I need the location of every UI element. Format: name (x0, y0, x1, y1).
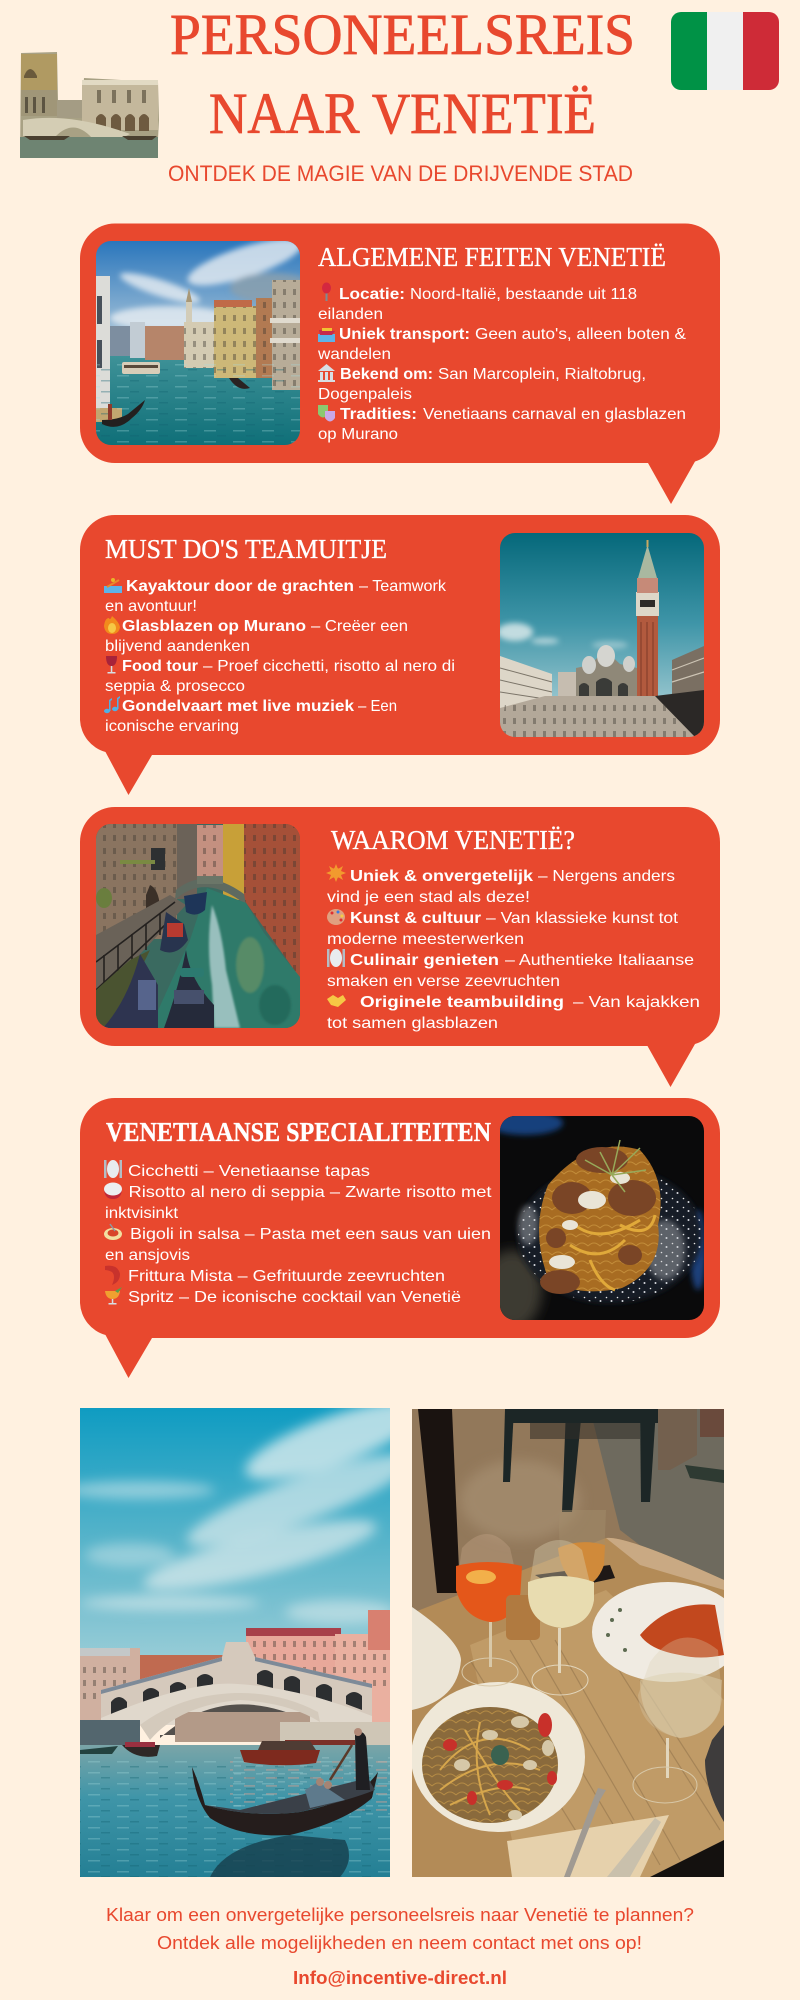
text: waarom: – Van kajakken (573, 994, 700, 1011)
icon: handshake (327, 995, 346, 1007)
text: waarom: smaken en verse zeevruchten (327, 973, 560, 990)
right procuratie (672, 646, 704, 694)
text: feiten: Noord-Italië, bestaande uit 118 (410, 286, 637, 303)
basket (705, 1725, 724, 1822)
text: waarom: Uniek & onvergetelijk (350, 868, 533, 885)
pasta mound (539, 1147, 661, 1291)
napkin and cutlery (507, 1815, 669, 1877)
text: waarom: Kunst & cultuur (350, 910, 481, 927)
panel: waarom venetië (80, 807, 720, 1087)
icon: Italian flag (671, 12, 779, 90)
gondola (192, 1767, 378, 1835)
icon: sun (326, 864, 346, 882)
text: must do's: Food tour (122, 658, 198, 675)
icon: rice bowl (104, 1182, 122, 1199)
icon: musical notes (104, 696, 120, 713)
text: must do's: iconische ervaring (105, 718, 239, 735)
speech bubble (80, 515, 720, 795)
small boats (122, 1745, 160, 1757)
text: feiten: San Marcoplein, Rialtobrug, (438, 366, 646, 383)
text: feiten: Locatie: (339, 286, 405, 303)
piazza (500, 696, 704, 737)
white wine (528, 1540, 594, 1628)
gondolas (184, 892, 207, 915)
text: specialiteiten: inktvisinkt (105, 1205, 179, 1222)
chair (503, 1409, 658, 1512)
text: must do's: seppia & prosecco (105, 678, 245, 695)
heading: VENETIAANSE SPECIALITEITEN (106, 1117, 491, 1147)
title: PERSONEELSREIS (170, 2, 635, 67)
text: feiten: Venetiaans carnaval en glasblazen (423, 406, 686, 423)
icon: shrimp (105, 1266, 120, 1285)
vaporetto (122, 362, 160, 374)
text: waarom: Originele teambuilding (360, 994, 564, 1011)
icon: round pushpin (322, 282, 331, 301)
footer text: Ontdek alle mogelijkheden en neem contact met ons op! (157, 1933, 642, 1953)
procuratie left (500, 656, 552, 708)
left buildings (96, 824, 177, 939)
icon: palette (327, 909, 345, 925)
text: must do's: blijvend aandenken (105, 638, 250, 655)
text: waarom: Culinair genieten (350, 952, 499, 969)
text: feiten: wandelen (317, 346, 391, 363)
heading: WAAROM VENETIË? (331, 825, 575, 855)
text: must do's: – Teamwork (359, 578, 447, 595)
text: must do's: Gondelvaart met live muziek (122, 698, 354, 715)
photo: San Marco square (497, 533, 704, 737)
waves (96, 360, 300, 445)
text: specialiteiten: Frittura Mista – Gefrituurde zeevruchten (128, 1268, 445, 1285)
title: NAAR VENETIË (209, 81, 596, 146)
text: waarom: tot samen glasblazen (327, 1015, 498, 1032)
speech bubble (80, 224, 720, 504)
panel: specialiteiten (80, 1098, 720, 1378)
text: must do's: – Creëer een (311, 618, 408, 635)
text: feiten: Uniek transport: (339, 326, 470, 343)
photo: Canal Grande (96, 241, 300, 445)
walkway and railing (96, 895, 186, 990)
campanile (637, 615, 658, 697)
gondolas (102, 400, 145, 427)
bridge (101, 1642, 372, 1718)
photo: restaurant table with spritz and pasta (411, 1409, 744, 1877)
speech bubble (80, 1098, 720, 1378)
gondolier and passengers (355, 1732, 370, 1790)
icon: spaghetti (104, 1224, 122, 1240)
text: waarom: moderne meesterwerken (327, 931, 524, 948)
footer text: Klaar om een onvergetelijke personeelsreis naar Venetië te plannen? (106, 1905, 694, 1925)
text: must do's: – Proef cicchetti, risotto al nero di (203, 658, 455, 675)
left napkin plate (412, 1607, 461, 1710)
text: specialiteiten: Risotto al nero di seppia – Zwarte risotto met (128, 1184, 492, 1201)
text: waarom: – Nergens anders (538, 868, 675, 885)
icon: classical building (318, 364, 335, 382)
text: specialiteiten (105, 1163, 492, 1306)
subtitle: ONTDEK DE MAGIE VAN DE DRIJVENDE STAD (168, 161, 633, 186)
water (150, 888, 300, 1028)
back glass (559, 1510, 606, 1586)
contact email: Info@incentive-direct.nl (293, 1968, 507, 1988)
text: must do's: en avontuur! (105, 598, 197, 615)
text: must do's (105, 578, 455, 735)
text: specialiteiten: Spritz – De iconische cocktail van Venetië (128, 1289, 461, 1306)
icon: plate and cutlery (104, 1160, 122, 1178)
icon: rowing boat (104, 578, 122, 593)
footer text (106, 1905, 694, 1953)
text: feiten: Bekend om: (340, 366, 433, 383)
icon: plate and cutlery (327, 949, 345, 967)
icon: theatre masks (318, 405, 335, 422)
bridge (175, 880, 246, 903)
photo: pasta dish (500, 1116, 704, 1320)
table (412, 1538, 724, 1877)
text: feiten: Dogenpaleis (318, 386, 412, 403)
lower wall (96, 950, 150, 1028)
text: feiten: eilanden (318, 306, 383, 323)
icon: fire (104, 616, 120, 634)
text: feiten (317, 286, 686, 443)
small tumbler (506, 1595, 540, 1640)
basilica (558, 672, 576, 696)
bowl with pasta (411, 1682, 585, 1832)
water (80, 1745, 390, 1877)
text: must do's: – Een (358, 698, 397, 715)
text: feiten: Geen auto's, alleen boten & (475, 326, 686, 343)
speech bubble (80, 807, 720, 1087)
text: waarom: – Van klassieke kunst tot (486, 910, 679, 927)
text: waarom: – Authentieke Italiaanse (505, 952, 694, 969)
text: must do's: Glasblazen op Murano (122, 618, 306, 635)
icon: wine glass (106, 656, 117, 674)
text: specialiteiten: en ansjovis (105, 1247, 190, 1264)
buildings (186, 300, 192, 322)
photo: side canal with gondolas (96, 824, 300, 1028)
right plate (592, 1582, 724, 1682)
palazzi (246, 1636, 335, 1676)
heading: MUST DO'S TEAMUITJE (105, 534, 387, 564)
panel: must do's (80, 515, 720, 795)
text: waarom (327, 868, 700, 1032)
title (170, 2, 635, 146)
text: specialiteiten: Bigoli in salsa – Pasta met een saus van uien (130, 1226, 491, 1243)
icon: tropical drink (105, 1287, 122, 1304)
phone (535, 1565, 615, 1583)
pole (418, 1409, 460, 1593)
front glass (638, 1638, 722, 1738)
text: must do's: Kayaktour door de grachten (126, 578, 354, 595)
heading: ALGEMENE FEITEN VENETIË (318, 242, 666, 272)
collage: Venetian palace cut-out (20, 52, 159, 158)
text: feiten: op Murano (318, 426, 398, 443)
text: specialiteiten: Cicchetti – Venetiaanse tapas (128, 1163, 370, 1180)
photo: Rialto bridge with gondola (80, 1408, 390, 1877)
text: waarom: vind je een stad als deze! (327, 889, 530, 906)
text: feiten: Tradities: (340, 406, 417, 423)
panel: algemene feiten (80, 224, 720, 504)
icon: ship (318, 328, 335, 342)
spritz (456, 1534, 522, 1622)
